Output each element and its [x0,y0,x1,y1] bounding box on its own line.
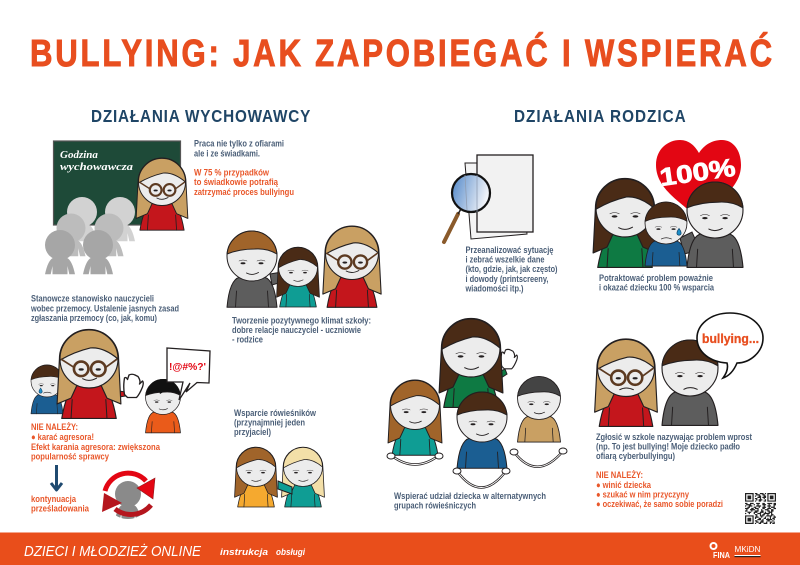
callout: what not to do: ● winić dziecka [596,480,652,490]
heading: teacher actions: DZIAŁANIA WYCHOWAWCY [91,106,310,126]
icon: heart 100%: 100% [658,154,737,192]
text: school climate: dobre relacje nauczyciel - uczniowie [232,325,361,335]
text: school climate [232,316,371,344]
text: alternative peer groups: Wspierać udział dziecka w alternatywnych [394,491,546,501]
text: report to school: Zgłosić w szkole nazywając problem wprost [596,432,752,442]
arrow: down [51,465,62,490]
footer band [0,532,800,565]
text: report to school: (np. To jest bullying! Moje dziecko padło [596,442,740,452]
callout: what not to do: NIE NALEŻY: [596,470,643,480]
icon: cycle of bullying [102,473,155,519]
illustration: class with teacher at chalkboard: Godzina [60,149,98,161]
QR code [745,493,776,524]
text: firm stance [30,294,179,323]
text: continued harassment [31,494,90,514]
text: witnesses: ale i ze świadkami. [194,148,260,158]
text: analyse the situation: (kto, gdzie, jak, jak często) [466,264,558,274]
callout: what not to do: ● oczekiwać, że samo sobie poradzi [596,499,723,509]
footer: manual label: instrukcja [220,547,268,558]
text: analyse the situation: wiadomości itp.) [465,284,524,294]
footer: usage label: obsługi [276,547,305,558]
text: take seriously: Potraktować problem poważnie [599,273,713,283]
text: peer support: (przynajmniej jeden [234,418,305,428]
illustration: two friends [235,447,324,507]
text: witnesses [194,138,294,197]
illustration: teacher, child and parent [227,226,381,307]
text: school climate: Tworzenie pozytywnego klimat szkoły: [232,316,371,326]
text: firm stance: zgłaszania przemocy (co, jak, komu) [31,313,157,323]
text: take seriously [599,273,715,293]
illustration: documents and magnifying glass [444,155,533,242]
text: firm stance: Stanowcze stanowisko nauczycieli [31,294,154,304]
logo: FINA [710,543,730,560]
logo: MKiDN: MKiDN [734,545,761,554]
text: alternative peer groups: grupach rówieśniczych [394,501,476,511]
callout: do not punish aggressor: ● karać agresora! [31,432,94,442]
logo: FINA: FINA [713,550,730,560]
callout: do not punish aggressor: Efekt karania agresora: zwiększona [31,442,161,452]
text: firm stance: wobec przemocy. Ustalenie jasnych zasad [30,303,179,313]
callout: do not punish aggressor: NIE NALEŻY: [31,422,78,432]
text: analyse the situation: Przeanalizować sytuację [466,245,554,255]
panel: teacher actions [30,106,381,519]
text: take seriously: i okazać dziecku 100 % wsparcia [599,283,715,293]
speech bubble: bullying [697,313,763,378]
callout: do not punish aggressor [31,422,161,462]
text: analyse the situation [465,245,558,294]
text: continued harassment: prześladowania [31,504,90,514]
callout: do not punish aggressor: popularność sprawcy [31,452,110,462]
text: analyse the situation: i zebrać wszelkie dane [466,255,544,265]
text: continued harassment: kontynuacja [31,494,77,504]
illustration: children with jump ropes [387,318,567,488]
text: witnesses: W 75 % przypadków [194,168,270,178]
text: analyse the situation: i dowody (printscreeny, [466,274,548,284]
text: report to school: ofiarą cyberbullyingu) [596,451,675,461]
title: BULLYING: JAK ZAPOBIEGAĆ I WSPIERAĆ [30,31,772,75]
text: witnesses: zatrzymać proces bullyingu [194,187,294,197]
heading: parent actions: DZIAŁANIA RODZICA [514,106,686,126]
callout: what not to do [596,470,723,509]
illustration: class with teacher at chalkboard: wychowawcza [60,161,134,173]
text: peer support [234,408,317,437]
speech bubble: bullying: bullying... [702,331,759,346]
illustration: reporting to the school [595,339,718,426]
illustration: supportive parents with child [593,178,743,267]
illustration: teacher stopping aggressor [31,329,210,433]
text: report to school [596,432,752,461]
footer: series title: DZIECI I MŁODZIEŻ ONLINE [24,543,202,560]
text: witnesses: Praca nie tylko z ofiarami [194,138,284,148]
text: school climate: - rodzice [232,334,263,344]
illustration: class with teacher at chalkboard [45,141,188,274]
panel: parent actions [387,106,763,511]
text: peer support: przyjaciel) [234,427,271,437]
text: alternative peer groups [394,491,546,511]
callout: what not to do: ● szukać w nim przyczyny [596,490,690,500]
text: peer support: Wsparcie rówieśników [234,408,317,418]
text: witnesses: to świadkowie potrafią [194,177,279,187]
illustration: teacher stopping aggressor: !@#%?' [169,361,206,373]
icon: heart 100% [656,140,741,220]
